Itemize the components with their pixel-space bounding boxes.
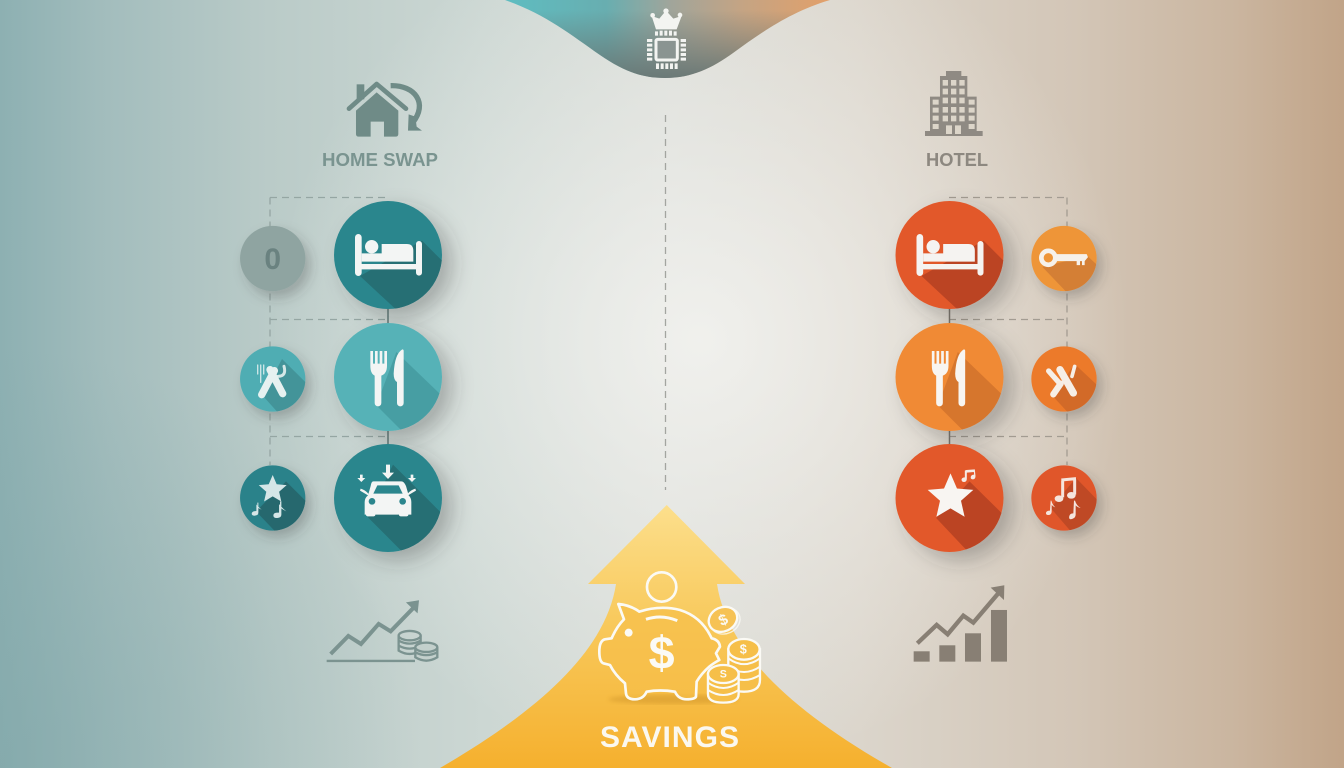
- circle: home swap meals: [334, 322, 463, 449]
- icon: crown on processor chip: [647, 8, 686, 69]
- left dashed connector frame: [270, 198, 388, 465]
- circle: hotel meals: [896, 322, 1024, 449]
- right dashed connector frame: [949, 198, 1067, 465]
- circle: hotel entertainment star: [896, 442, 1024, 572]
- heading: hotel: HOTEL: [926, 149, 988, 170]
- circle: home swap reduced dining: [240, 346, 316, 424]
- left solid connectors: [387, 305, 389, 447]
- circle: hotel bed: [896, 199, 1024, 327]
- circle: zero accommodation cost: 0: [264, 243, 281, 276]
- icon: piggy bank with coins: $: [740, 642, 747, 656]
- icon: home swap savings trend with coins: [327, 601, 437, 661]
- center dashed divider: [664, 115, 666, 490]
- right solid connectors: [948, 305, 950, 447]
- icon: piggy bank with coins: $: [649, 626, 675, 678]
- circle: home swap bed: [334, 199, 463, 327]
- icon: home swap house: [349, 84, 422, 137]
- icon: piggy bank with coins: [599, 572, 760, 704]
- circle: zero accommodation cost: [240, 226, 305, 291]
- circle: hotel dining cost: [1030, 346, 1108, 424]
- heading: savings: SAVINGS: [600, 721, 739, 754]
- circle: home swap entertainment: [240, 465, 316, 543]
- circle: home swap car: [334, 442, 463, 570]
- icon: piggy bank with coins: $: [716, 611, 731, 630]
- heading: home swap: HOME SWAP: [322, 149, 438, 170]
- top wave banner: [505, 0, 830, 78]
- circle: hotel key: [1030, 226, 1108, 304]
- icon: hotel building: [925, 71, 983, 136]
- circle: hotel music: [1031, 465, 1108, 543]
- icon: piggy bank with coins: S: [720, 669, 727, 681]
- icon: hotel rising cost bars: [914, 585, 1007, 662]
- savings arrow: [440, 505, 892, 768]
